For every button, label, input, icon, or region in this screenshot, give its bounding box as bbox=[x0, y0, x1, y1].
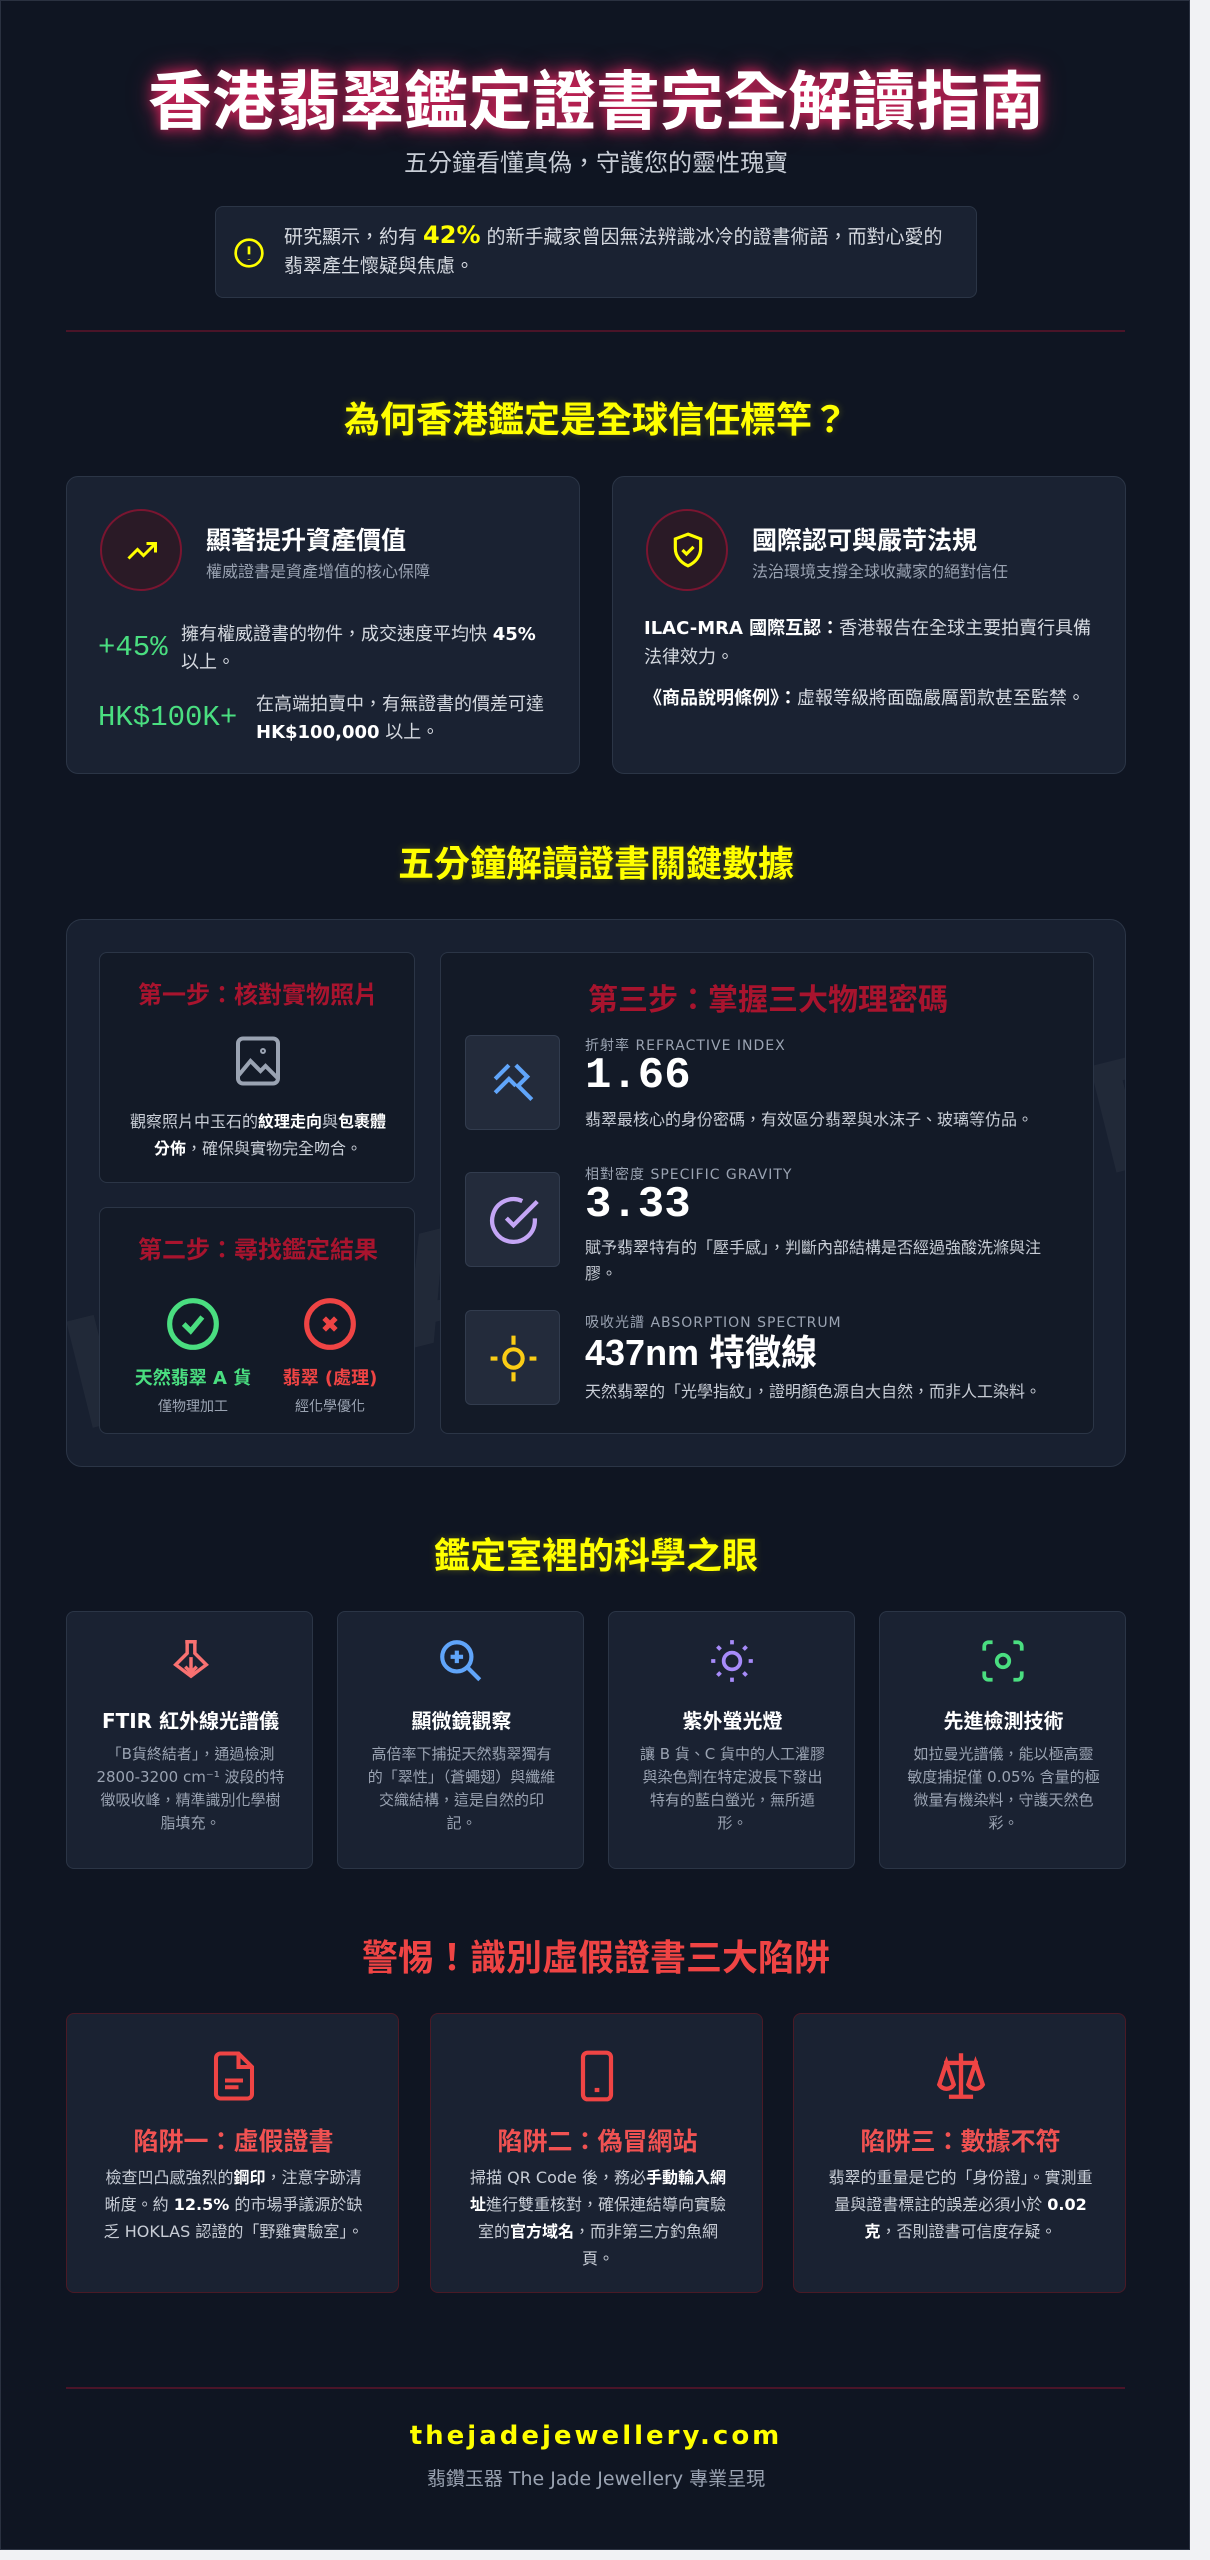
icon: zoom bbox=[440, 1640, 482, 1682]
panel: international recognition: 法治環境支撐全球收藏家的絕對信任 bbox=[752, 562, 1008, 581]
panel: trap 3: 陷阱三：數據不符 bbox=[860, 2127, 1060, 2156]
step 1 card bbox=[99, 952, 415, 1183]
heading: why HK: 為何香港鑑定是全球信任標竿？ bbox=[344, 399, 848, 440]
panel: FTIR: 「B貨終結者」，通過檢測 2800-3200 cm⁻¹ 波段的特徵吸收峰，精準識別化學樹脂填充。 bbox=[96, 1745, 285, 1832]
panel: advanced: 先進檢測技術 bbox=[944, 1709, 1064, 1733]
panel: asset value: 權威證書是資產增值的核心保障 bbox=[206, 562, 430, 581]
subtitle: 五分鐘看懂真偽，守護您的靈性瑰寶 bbox=[404, 149, 788, 177]
icon: shield bbox=[646, 509, 728, 591]
title: 香港翡翠鑑定證書完全解讀指南 bbox=[148, 66, 1044, 138]
icon: sun bbox=[711, 1640, 753, 1682]
item: absorption spectrum bbox=[465, 1310, 1041, 1405]
footer: tagline: 翡鑽玉器 The Jade Jewellery 專業呈現 bbox=[427, 2468, 765, 2490]
panel: asset value bbox=[66, 476, 580, 774]
step 2 card bbox=[99, 1207, 415, 1434]
heading: lab: 鑑定室裡的科學之眼 bbox=[434, 1535, 758, 1576]
panel: microscope bbox=[337, 1611, 584, 1869]
icon: scan bbox=[982, 1640, 1024, 1682]
panel: UV: 讓 B 貨、C 貨中的人工灌膠與染色劑在特定波長下發出特有的藍白螢光，無所遁形。 bbox=[640, 1745, 825, 1832]
callout: research stat bbox=[215, 206, 977, 298]
stat: +45%: +45% bbox=[98, 631, 168, 664]
panel: trap 3: 翡翠的重量是它的「身份證」。實測重量與證書標註的誤差必須小於 0.02 克，否則證書可信度存疑。 bbox=[828, 2168, 1092, 2241]
item: refractive index: 折射率 REFRACTIVE INDEX bbox=[585, 1038, 786, 1054]
stat: HK$100K+: 在高端拍賣中，有無證書的價差可達 HK$100,000 以上。 bbox=[256, 694, 544, 743]
icon: trending up bbox=[100, 509, 182, 591]
icon: document bbox=[214, 2052, 254, 2100]
stat: HK$100K+ bbox=[98, 694, 544, 743]
panel: UV: 紫外螢光燈 bbox=[682, 1709, 782, 1733]
panel: trap 3 bbox=[793, 2013, 1126, 2293]
item: refractive index: 翡翠最核心的身份密碼，有效區分翡翠與水沫子、玻璃等仿品。 bbox=[585, 1110, 1033, 1129]
panel: advanced: 如拉曼光譜儀，能以極高靈敏度捕捉僅 0.05% 含量的極微量有機染料，守護天然色彩。 bbox=[907, 1745, 1100, 1832]
panel: trap 1: 檢查凹凸感強烈的鋼印，注意字跡清晰度。約 12.5% 的市場爭議源於缺乏 HOKLAS 認證的「野雞實驗室」。 bbox=[104, 2168, 363, 2241]
item: specific gravity: 賦予翡翠特有的「壓手感」，判斷內部結構是否經過強酸洗滌與注膠。 bbox=[585, 1238, 1041, 1283]
item: absorption spectrum: 437nm 特徵線 bbox=[585, 1332, 817, 1373]
footer: url: thejadejewellery.com bbox=[410, 2421, 782, 2451]
icon: natural A check: 僅物理加工 bbox=[158, 1399, 228, 1415]
panel: trap 2: 掃描 QR Code 後，務必手動輸入網址進行雙重核對，確保連結導向實驗室的官方域名，而非第三方釣魚網頁。 bbox=[470, 2168, 726, 2268]
stat: HK$100K+: HK$100K+ bbox=[98, 701, 237, 734]
panel: microscope: 高倍率下捕捉天然翡翠獨有的「翠性」（蒼蠅翅）與纖維交織結構，這是自然的印記。 bbox=[368, 1745, 555, 1832]
icon: FTIR bbox=[173, 1640, 209, 1678]
icon: natural A check bbox=[135, 1298, 251, 1415]
panel: trap 1 bbox=[66, 2013, 399, 2293]
step 1 card: 觀察照片中玉石的紋理走向與包裹體分佈，確保與實物完全吻合。 bbox=[130, 1112, 386, 1158]
step 1 card: 第一步：核對實物照片 bbox=[138, 981, 378, 1009]
icon: natural A check: 天然翡翠 A 貨 bbox=[135, 1368, 251, 1389]
item: specific gravity bbox=[465, 1166, 1041, 1283]
text: ILAC-MRA: ILAC-MRA 國際互認：香港報告在全球主要拍賣行具備法律效力。 bbox=[644, 618, 1091, 668]
icon: scale bbox=[936, 2053, 986, 2099]
icon: alert bbox=[234, 238, 264, 268]
item: refractive index: 1.66 bbox=[585, 1051, 691, 1101]
icon: treated x: 經化學優化 bbox=[295, 1399, 365, 1415]
panel: trap 2: 陷阱二：偽冒網站 bbox=[497, 2127, 698, 2156]
panel: trap 2 bbox=[430, 2013, 763, 2293]
stat: +45%: 擁有權威證書的物件，成交速度平均快 45% 以上。 bbox=[181, 624, 536, 673]
item: specific gravity: 相對密度 SPECIFIC GRAVITY bbox=[585, 1167, 792, 1183]
step 3 card: 第三步：掌握三大物理密碼 bbox=[588, 983, 948, 1018]
step 2 card: 第二步：尋找鑑定結果 bbox=[138, 1236, 378, 1264]
item: absorption spectrum: 天然翡翠的「光學指紋」，證明顏色源自大自然，而非人工染料。 bbox=[585, 1382, 1041, 1401]
heading: traps: 警惕！識別虛假證書三大陷阱 bbox=[362, 1937, 830, 1978]
item: refractive index bbox=[465, 1035, 1033, 1130]
step 3 card bbox=[440, 952, 1094, 1434]
panel: FTIR bbox=[66, 1611, 313, 1869]
icon: phone bbox=[580, 2050, 614, 2102]
panel: microscope: 顯微鏡觀察 bbox=[412, 1709, 512, 1733]
panel: FTIR: FTIR 紅外線光譜儀 bbox=[102, 1709, 279, 1733]
panel: trap 1: 陷阱一：虛假證書 bbox=[133, 2127, 334, 2156]
callout: research stat: 研究顯示，約有 42% 的新手藏家曾因無法辨識冰冷的證書術語，而對心愛的翡翠產生懷疑與焦慮。 bbox=[284, 221, 943, 277]
icon: image bbox=[236, 1036, 280, 1086]
heading: key data: 五分鐘解讀證書關鍵數據 bbox=[398, 843, 794, 884]
panel: asset value: 顯著提升資產價值 bbox=[206, 526, 406, 555]
panel: international recognition bbox=[612, 476, 1126, 774]
panel: international recognition: 國際認可與嚴苛法規 bbox=[752, 526, 977, 555]
item: absorption spectrum: 吸收光譜 ABSORPTION SPECTRUM bbox=[585, 1315, 842, 1331]
text: ordinance: 《商品說明條例》：虛報等級將面臨嚴厲罰款甚至監禁。 bbox=[644, 688, 1085, 709]
panel: UV bbox=[608, 1611, 855, 1869]
panel: advanced bbox=[879, 1611, 1126, 1869]
icon: treated x bbox=[283, 1298, 377, 1415]
icon: treated x: 翡翠 (處理) bbox=[283, 1368, 377, 1389]
item: specific gravity: 3.33 bbox=[585, 1180, 691, 1230]
